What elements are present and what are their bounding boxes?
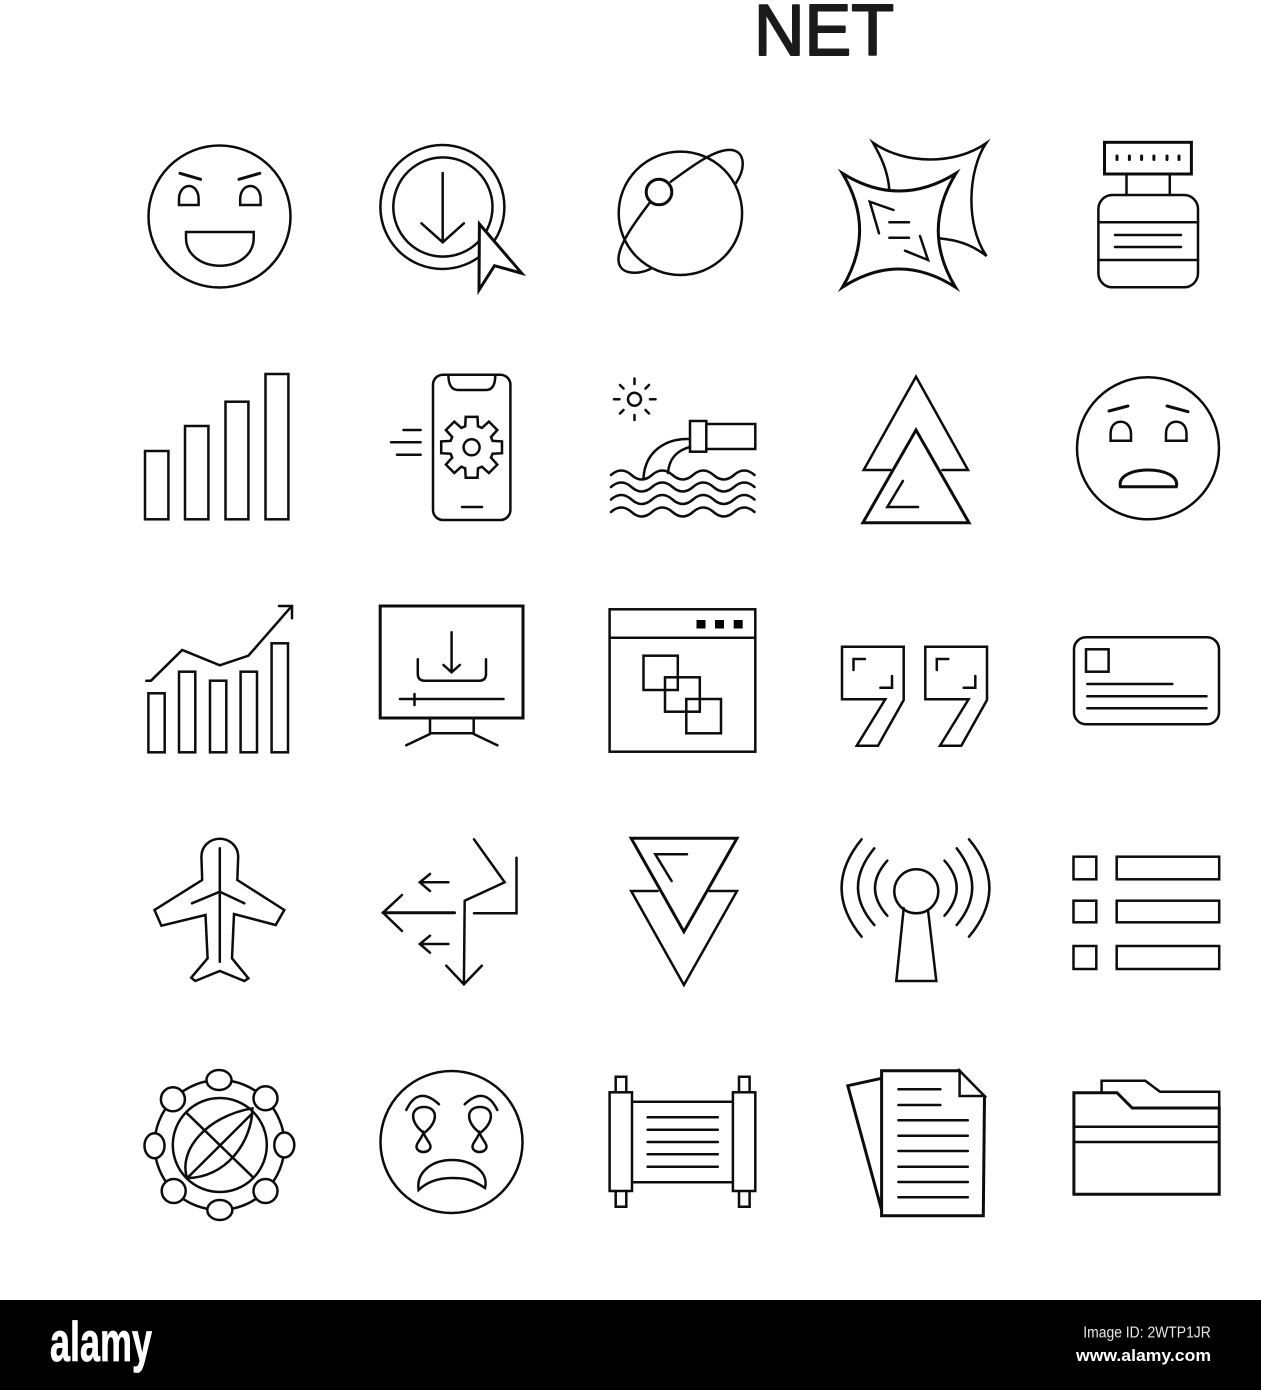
icon: planet with orbit	[618, 150, 743, 275]
trend line arrow	[146, 606, 292, 681]
motion lines	[391, 430, 421, 455]
crying eyes	[413, 1107, 491, 1133]
icon: crying face	[380, 1071, 522, 1213]
icon: sewage pipe over water	[611, 378, 755, 516]
icon: overlapping stretched sheets	[842, 143, 986, 287]
icon: double down triangles	[631, 838, 737, 985]
signal arcs	[842, 839, 989, 937]
globe meridians	[185, 1108, 252, 1178]
footer logo: alamy	[50, 1310, 152, 1373]
icon: branching arrows	[383, 839, 516, 984]
icon: folder	[1074, 1081, 1219, 1194]
tears	[416, 1133, 486, 1152]
laughing face eyes	[179, 186, 261, 205]
icon: global network	[144, 1070, 294, 1220]
gear	[441, 417, 502, 478]
footer banner	[0, 1300, 1261, 1390]
icon: broadcast antenna	[842, 839, 989, 981]
image id: Image ID: 2WTP1JR	[1083, 1324, 1211, 1342]
icon: list	[1074, 857, 1219, 969]
icon: smartphone settings	[391, 375, 510, 520]
window buttons	[696, 620, 743, 628]
icon: growth chart with arrow	[146, 606, 292, 752]
icon: rising bar chart	[145, 374, 288, 519]
icon: laughing face	[148, 146, 290, 288]
worried mouth	[1120, 470, 1177, 487]
bottle cap dots	[1117, 156, 1179, 160]
icon: monitor download	[380, 606, 523, 745]
icon: quotation marks	[842, 647, 987, 746]
sun	[614, 378, 656, 420]
network nodes	[144, 1070, 294, 1220]
crying mouth	[418, 1160, 486, 1190]
orbiting moon	[646, 179, 672, 205]
icon: documents	[848, 1071, 984, 1216]
website: www.alamy.com	[1075, 1347, 1211, 1365]
water waves	[611, 470, 754, 516]
download arrow	[421, 173, 464, 242]
icon: browser window with layers	[610, 609, 755, 752]
laughing face eyebrows	[180, 173, 260, 179]
laughing face mouth	[186, 232, 254, 266]
icon: worried face	[1077, 377, 1219, 519]
cursor	[479, 224, 522, 290]
icon: scroll	[610, 1077, 755, 1207]
icon: double up triangles	[863, 377, 969, 523]
icon: airplane	[154, 839, 284, 981]
icon: download button with cursor	[380, 145, 522, 290]
icon: bottle	[1098, 142, 1198, 287]
icon: id card	[1074, 637, 1219, 724]
